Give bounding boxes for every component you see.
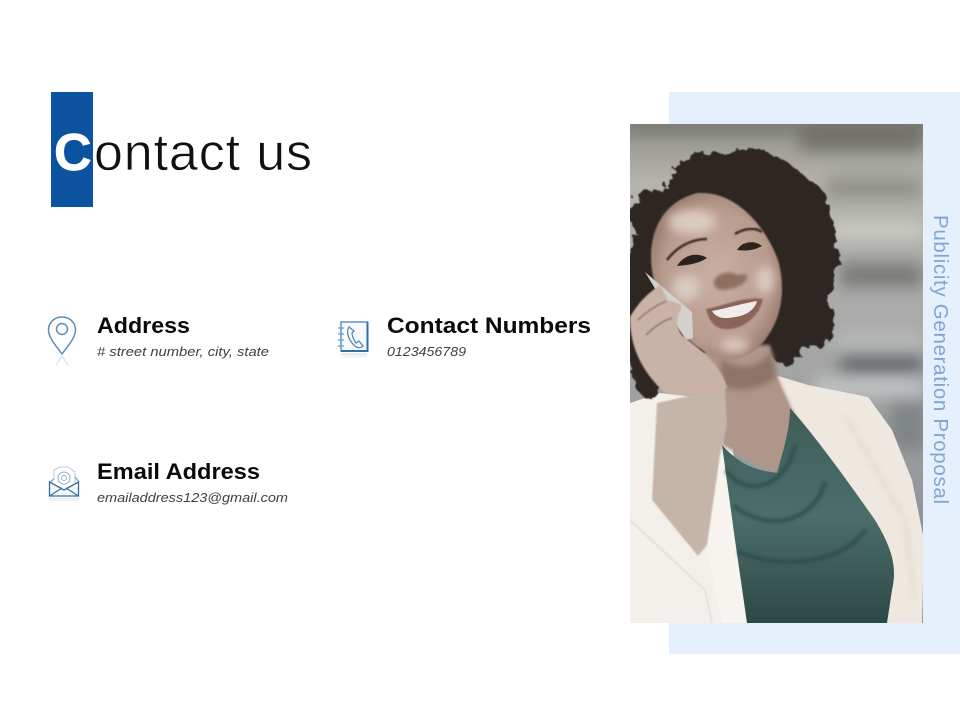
- hair: [624, 148, 840, 398]
- title: C: [54, 124, 92, 182]
- detail: emailaddress123@gmail.com: [97, 490, 288, 505]
- jacket: [630, 375, 924, 623]
- neck shadow: [720, 350, 776, 390]
- title: ontact us: [94, 124, 312, 182]
- teeth: [712, 301, 757, 318]
- nose: [714, 272, 747, 290]
- icon: phone book: [338, 322, 368, 359]
- hand: [630, 285, 727, 395]
- forearm: [652, 388, 727, 556]
- phone: [645, 272, 693, 340]
- highlights: [668, 210, 774, 352]
- heading: Email Address: [97, 459, 260, 484]
- icon: open envelope: [49, 467, 79, 503]
- contact item: address: [48, 313, 269, 365]
- mouth: [706, 298, 763, 329]
- vertical side label: Publicity Generation Proposal: [929, 215, 952, 504]
- heading: Contact Numbers: [387, 313, 591, 338]
- eyes: [677, 255, 707, 266]
- face: [651, 193, 782, 360]
- contact item: contact numbers: [338, 313, 591, 359]
- detail: 0123456789: [387, 344, 466, 359]
- icon: map pin: [48, 317, 76, 365]
- brows: [667, 239, 707, 260]
- photo: woman on phone: [620, 114, 930, 623]
- contact item: email address: [49, 459, 288, 505]
- slide: [48, 92, 960, 654]
- heading: Address: [97, 313, 190, 338]
- title accent block: [51, 92, 93, 207]
- green top: [722, 408, 894, 623]
- panel: side band: [669, 92, 960, 654]
- blurred background: [620, 114, 930, 623]
- neck and chest: [705, 345, 797, 475]
- detail: # street number, city, state: [97, 344, 269, 359]
